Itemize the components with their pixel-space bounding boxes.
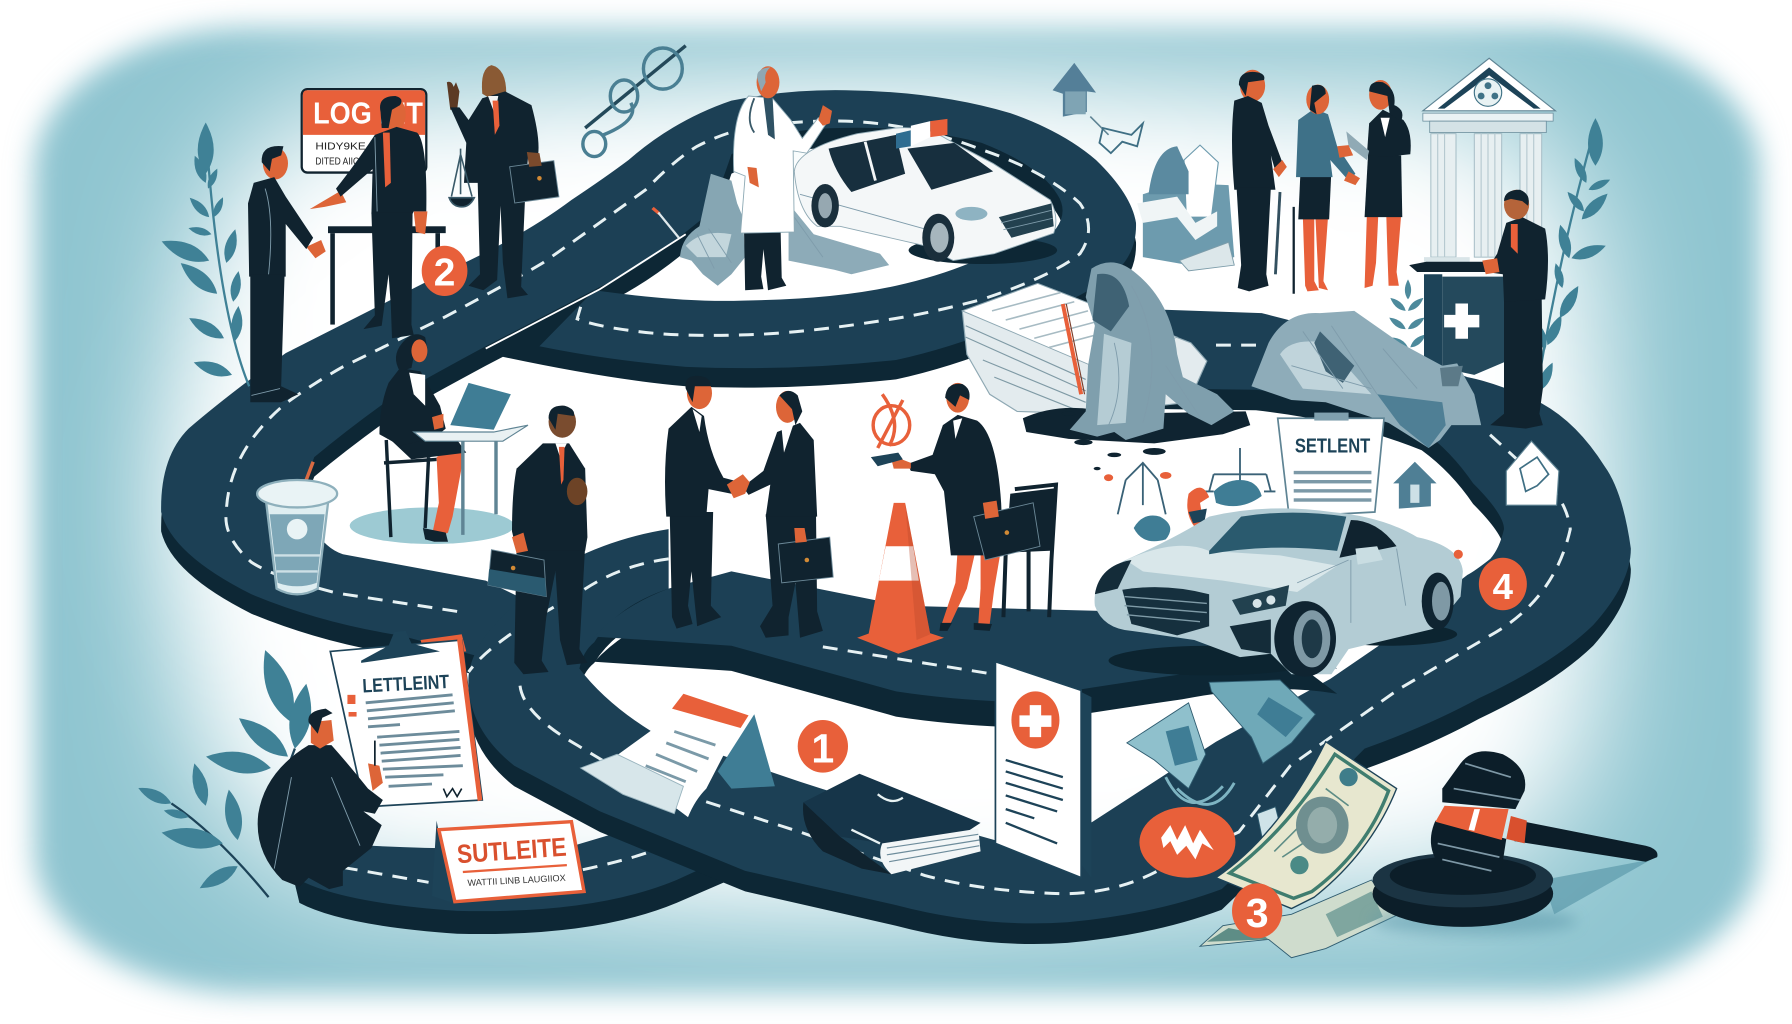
icon: traffic cone [857, 503, 944, 654]
person: man at podium [1482, 190, 1548, 429]
plant: fern behind podium [1387, 279, 1428, 350]
table [328, 226, 446, 325]
sign: SUTLEITE [432, 821, 584, 903]
person: injured figure on ground [651, 174, 889, 286]
badge: number 2 [422, 246, 467, 296]
person: left man [665, 376, 741, 629]
icon: glass with orange straw [257, 462, 337, 594]
person: seated woman at laptop [350, 334, 528, 544]
person: woman in blue blazer [1296, 85, 1360, 291]
badge: number 1 [798, 720, 848, 773]
person: woman with clipboard near cone [871, 383, 1040, 631]
icon: stacked papers [962, 283, 1207, 414]
sign: LOG D T [302, 89, 426, 173]
icon: scales [449, 149, 474, 207]
document: clipboard letter: LETTLEINT [362, 671, 450, 698]
person: man with cane [1232, 70, 1294, 294]
badge: number 2: 2 [434, 252, 455, 295]
sign: LOG D T: DITED AIIOU [315, 157, 366, 168]
person: lying injured figure [1251, 311, 1481, 448]
vehicle: silver sports car [1095, 508, 1463, 677]
icon: dollar banknotes [1200, 742, 1399, 958]
plant: upper right [1534, 118, 1612, 393]
icon: crossed orange symbol [873, 394, 910, 448]
icon: book [803, 774, 981, 874]
icon: briefcase [488, 550, 546, 597]
sign: LOG D T: HIDY9KE [315, 142, 366, 153]
icon: scattered money [1127, 680, 1315, 841]
icon: small house [1053, 63, 1109, 135]
badge: number 4: 4 [1493, 566, 1514, 607]
person: doctor [733, 66, 832, 290]
badge: oval heart rate [1139, 807, 1235, 878]
document: clipboard letter [330, 631, 482, 807]
icon: gavel [1371, 751, 1657, 935]
icon: briefcase [974, 501, 1040, 560]
podium with cross [1409, 262, 1543, 375]
document: medical form [995, 662, 1091, 878]
person: crouching man reading [258, 709, 383, 889]
document: settlement [1278, 413, 1384, 517]
icon: briefcase [510, 152, 559, 203]
people: handshake [665, 376, 833, 638]
plant: lower left [136, 646, 316, 897]
icon: courthouse [1423, 58, 1555, 265]
document: settlement: SETLENT [1295, 435, 1371, 458]
icon: small house right [1393, 462, 1437, 509]
road: bottom-left hairpin [286, 823, 743, 934]
sign: SUTLEITE: SUTLEITE [456, 832, 567, 869]
person: man facing right [248, 146, 326, 402]
sign: SUTLEITE: WATTII LINB LAUGIIOX [467, 873, 566, 888]
road: upper loop [161, 90, 1136, 682]
person: man raising hand with briefcase [447, 65, 559, 298]
icon: chair [384, 440, 437, 537]
icon: briefcase [778, 528, 833, 583]
person: woman with clipboard [1337, 80, 1411, 288]
person: man with briefcase [488, 406, 587, 674]
icon: broken scrap [1099, 123, 1143, 153]
plant: upper left [159, 123, 249, 386]
vehicle: white police car [794, 119, 1057, 264]
road: central platform [594, 571, 1337, 727]
sign: LOG D T: LOG DIT [313, 95, 423, 130]
person: hooded grieving figure [1023, 262, 1250, 470]
badge: number 4 [1479, 558, 1527, 610]
person: right man [727, 391, 833, 638]
road: main lower sweep [468, 310, 1631, 944]
chair with briefcase [1001, 485, 1057, 617]
scene: ruined house rubble [1137, 145, 1234, 271]
badge: number 3 [1232, 883, 1282, 938]
icon: calendar scroll [581, 694, 775, 817]
badge: number 1: 1 [811, 725, 834, 771]
badge: number 3: 3 [1246, 890, 1269, 936]
icon: caduceus [583, 46, 686, 157]
icon: road sign house [1506, 441, 1559, 505]
person: man with orange tie [310, 96, 427, 338]
icons: small scales and scraps [1104, 448, 1275, 541]
